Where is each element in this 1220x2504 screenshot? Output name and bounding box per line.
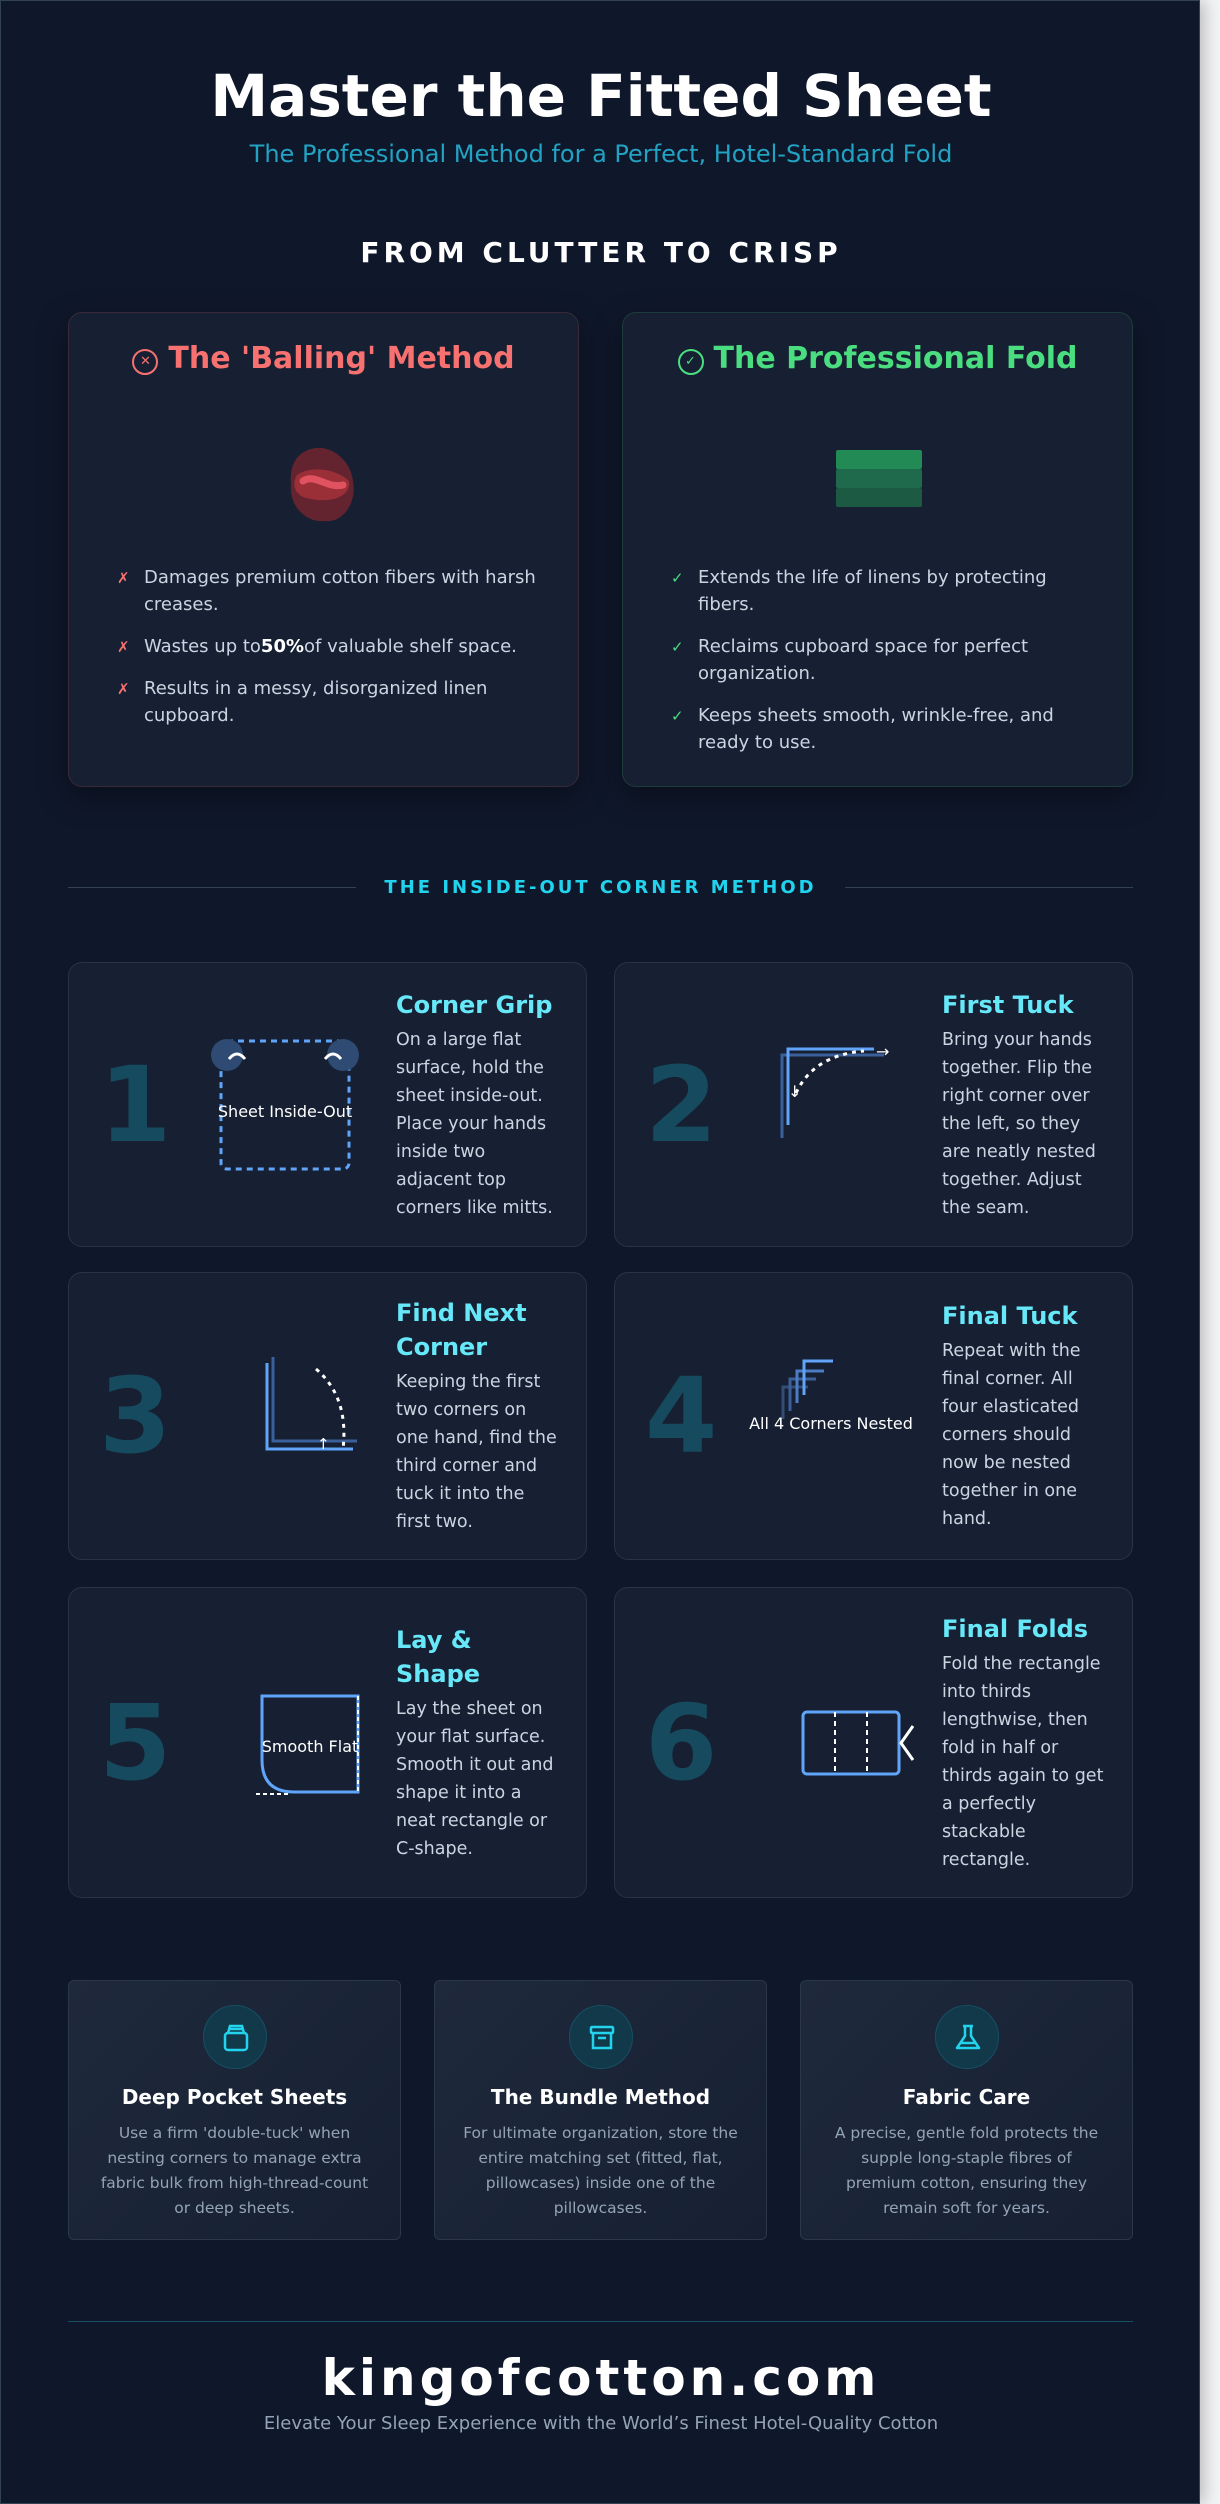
number 6: 6 xyxy=(645,1682,717,1804)
text: find next corner: tuck it into the xyxy=(396,1484,524,1504)
text: lay and shape: Shape xyxy=(396,1660,480,1688)
number 5: 5 xyxy=(99,1682,171,1804)
list: balling drawbacks: ✗ xyxy=(117,680,130,698)
list: professional benefits: Reclaims cupboard space for perfect organization. xyxy=(698,636,1028,684)
tip: bundle method xyxy=(434,1980,767,2240)
text: first tuck: First Tuck xyxy=(942,990,1074,1018)
text: final tuck: Final Tuck xyxy=(942,1302,1078,1330)
text: corner grip: Corner Grip xyxy=(396,990,552,1018)
text: find next corner: first two. xyxy=(396,1512,473,1532)
text: final folds: Final Folds xyxy=(942,1614,1088,1642)
footer brand: kingofcotton.com xyxy=(322,2349,880,2407)
tip: deep pocket sheets: Use a firm 'double-tuck' when nesting corners to manage extra fabric bulk from high-thread-count or deep sheets. xyxy=(101,2124,368,2217)
icon: sheet inside-out: Sheet Inside-Out xyxy=(218,1102,352,1121)
icon: crumpled ball xyxy=(290,448,354,522)
text: find next corner: two corners on xyxy=(396,1400,526,1420)
list: balling drawbacks: ✗ xyxy=(117,638,130,656)
list: balling drawbacks: Damages premium cotton fibers with harsh creases. xyxy=(144,567,536,615)
panel: professional fold xyxy=(622,312,1133,787)
text: find next corner: Keeping the first xyxy=(396,1372,540,1392)
list: professional benefits: Keeps sheets smooth, wrinkle-free, and ready to use. xyxy=(698,705,1054,753)
icon: first tuck xyxy=(780,1043,889,1138)
icon: find next corner: ↑ xyxy=(317,1435,330,1453)
text: find next corner: Find Next xyxy=(396,1299,527,1327)
step 4 xyxy=(614,1272,1133,1560)
icon: first tuck: ↓ xyxy=(788,1082,801,1101)
step 1 xyxy=(68,962,587,1247)
text: find next corner: one hand, find the xyxy=(396,1428,557,1448)
list: professional benefits: ✓ xyxy=(671,569,684,587)
text: lay and shape xyxy=(396,1626,554,1858)
step 3 xyxy=(68,1272,587,1560)
number 2: 2 xyxy=(645,1044,717,1166)
tip: fabric care xyxy=(800,1980,1133,2240)
icon: all corners nested: All 4 Corners Nested xyxy=(749,1414,913,1433)
tip: deep pocket sheets xyxy=(68,1980,401,2240)
list: professional benefits: ✓ xyxy=(671,707,684,725)
step 6 xyxy=(614,1587,1133,1898)
text: corner grip: On a large flat surface, hold the sheet inside-out. Place your hands inside two adjacent top corners like mitts. xyxy=(396,1030,553,1218)
heading: professional fold: The Professional Fold xyxy=(714,341,1077,376)
text: final folds: Fold the rectangle into thirds lengthwise, then fold in half or thirds again to get a perfectly stackable rectangle. xyxy=(942,1654,1103,1870)
icon: archive box xyxy=(569,2005,633,2069)
heading: balling method: ✕ xyxy=(140,354,151,369)
icon: flask xyxy=(935,2005,999,2069)
text: find next corner: third corner and xyxy=(396,1456,537,1476)
icon: smooth flat xyxy=(256,1694,360,1795)
section heading: from clutter to crisp: FROM CLUTTER TO CRISP xyxy=(360,236,842,269)
text: first tuck: Bring your hands together. Flip the right corner over the left, so they are neatly nested together. Adjust the seam. xyxy=(942,1030,1096,1218)
list: balling drawbacks xyxy=(117,567,536,726)
title: Master the Fitted Sheet xyxy=(210,62,992,130)
list: professional benefits xyxy=(671,567,1054,753)
list: balling drawbacks: ✗ xyxy=(117,569,130,587)
step 5 xyxy=(68,1587,587,1898)
heading: professional fold: ✓ xyxy=(685,354,696,369)
number 1: 1 xyxy=(99,1044,171,1166)
list: professional benefits: Extends the life of linens by protecting fibers. xyxy=(698,567,1047,615)
number 3: 3 xyxy=(99,1355,171,1477)
footer divider xyxy=(68,2321,1133,2322)
icon: folded stack xyxy=(836,450,922,507)
heading: balling method: The 'Balling' Method xyxy=(168,341,515,376)
number 4: 4 xyxy=(645,1355,717,1477)
icon: all corners nested xyxy=(749,1360,913,1433)
text: lay and shape: Lay the sheet on your flat surface. Smooth it out and shape it into a neat rectangle or C-shape. xyxy=(396,1698,554,1858)
list: balling drawbacks: Results in a messy, disorganized linen cupboard. xyxy=(144,678,487,726)
text: find next corner xyxy=(396,1299,557,1532)
icon: jar xyxy=(203,2005,267,2069)
text: lay and shape: Lay & xyxy=(396,1626,472,1654)
tip: bundle method: For ultimate organization, store the entire matching set (fitted, flat, pillowcases) inside one of the pillowcases. xyxy=(463,2124,738,2217)
text: find next corner: Corner xyxy=(396,1333,487,1361)
list: balling drawbacks: Wastes up to50%of valuable shelf space. xyxy=(144,636,517,657)
tip: fabric care: Fabric Care xyxy=(903,2085,1030,2109)
icon: final folds xyxy=(802,1710,914,1776)
icon: sheet inside-out xyxy=(211,1039,359,1170)
list: professional benefits: ✓ xyxy=(671,638,684,656)
section heading: inside-out corner method: THE INSIDE-OUT CORNER METHOD xyxy=(384,877,817,898)
panel: balling method xyxy=(68,312,579,787)
subtitle: The Professional Method for a Perfect, Hotel-Standard Fold xyxy=(250,140,952,168)
tip: bundle method: The Bundle Method xyxy=(491,2085,710,2109)
icon: smooth flat: Smooth Flat xyxy=(262,1737,358,1756)
text: final tuck: Repeat with the final corner. All four elasticated corners should now be nested together in one hand. xyxy=(942,1341,1081,1529)
tip: fabric care: A precise, gentle fold protects the supple long-staple fibres of premium cotton, ensuring they remain soft for years. xyxy=(835,2124,1098,2217)
footer tagline: Elevate Your Sleep Experience with the World’s Finest Hotel-Quality Cotton xyxy=(264,2413,938,2434)
icon: find next corner xyxy=(266,1357,357,1453)
step 2 xyxy=(614,962,1133,1247)
tip: deep pocket sheets: Deep Pocket Sheets xyxy=(122,2085,347,2109)
